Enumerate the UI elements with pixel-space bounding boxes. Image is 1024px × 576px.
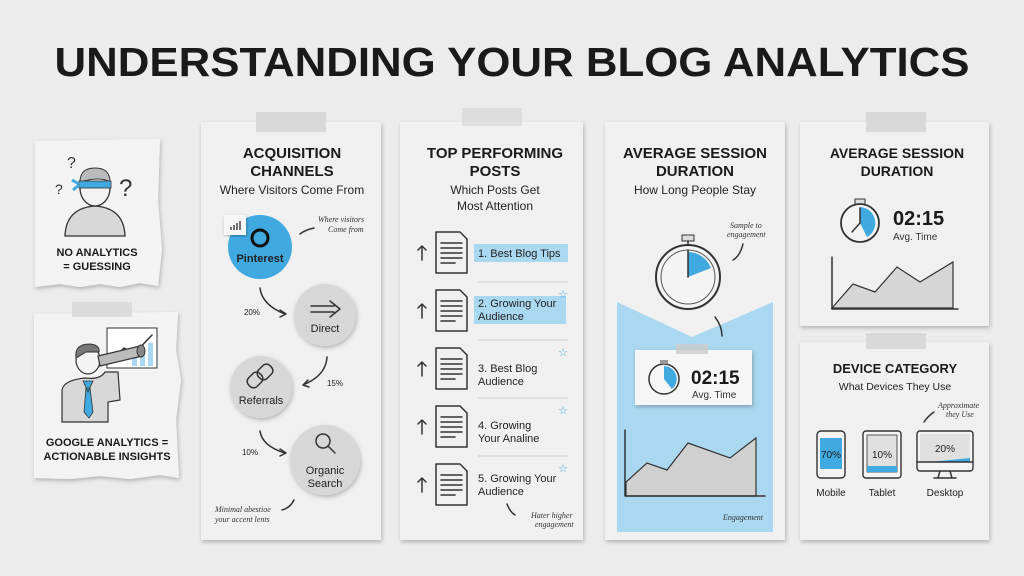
text: no analytics = guessing: NO ANALYTICS: [56, 247, 138, 259]
panel: average session duration summary: [800, 112, 989, 326]
icon: desktop 20%: 20%: [935, 444, 955, 455]
note: approximate: Approximate: [937, 401, 979, 410]
heading: DURATION: [861, 163, 933, 179]
chart: engagement area: Engagement: [722, 513, 764, 522]
list: posts: ☆: [558, 289, 568, 301]
text: google analytics = actionable insights: [43, 437, 171, 463]
arrows with percents: 20%: [244, 308, 260, 317]
callout: 02:15: [635, 344, 752, 405]
panel: top performing posts: [400, 108, 583, 540]
heading: Most Attention: [457, 199, 533, 213]
icon: tablet 10%: [863, 431, 901, 499]
callout: 02:15: 02:15: [691, 368, 740, 389]
heading: [623, 145, 767, 197]
node: organic search: [290, 425, 360, 495]
note: minimal: your accent lents: [214, 515, 270, 524]
list: posts: Audience: [478, 311, 524, 323]
heading: What Devices They Use: [839, 381, 951, 393]
note: higher engagement: [507, 504, 574, 529]
node: organic search: Search: [308, 478, 342, 490]
icon: blindfolded person: ?: [55, 181, 63, 197]
list: posts: ☆: [558, 463, 568, 475]
node: referrals: [230, 356, 292, 418]
panel: average session duration summary: Avg. Time: [893, 232, 938, 243]
note: where visitors come from: Come from: [328, 225, 364, 234]
icon: desktop 20%: Desktop: [927, 488, 964, 499]
list: posts: Audience: [478, 486, 524, 498]
callout: 02:15: Avg. Time: [692, 390, 737, 401]
note: approximate: they Use: [946, 410, 974, 419]
node: direct: [294, 284, 356, 346]
heading: [830, 145, 964, 179]
node: referrals: Referrals: [239, 395, 284, 407]
icon: blindfolded person: ?: [119, 175, 132, 202]
icon: desktop 20%: [917, 431, 973, 499]
arrows with percents: 15%: [327, 379, 343, 388]
note: sample to engagement: engagement: [727, 230, 766, 239]
note: minimal: [214, 500, 294, 524]
list: posts: 3. Best Blog: [478, 363, 537, 375]
title: UNDERSTANDING YOUR BLOG ANALYTICS: [54, 39, 970, 85]
heading: AVERAGE SESSION: [623, 145, 767, 162]
note: where visitors come from: [300, 215, 364, 234]
panel: average session duration summary: 02:15: [893, 208, 944, 230]
text: google analytics = actionable insights: GOOGLE ANALYTICS =: [46, 437, 168, 449]
icon: stopwatch: [656, 235, 720, 309]
panel: average session duration: [605, 122, 785, 540]
heading: Where Visitors Come From: [220, 183, 364, 197]
text: google analytics = actionable insights: ACTIONABLE INSIGHTS: [43, 451, 171, 463]
chart: area: [832, 257, 958, 309]
list: posts: ☆: [558, 405, 568, 417]
heading: CHANNELS: [250, 163, 334, 180]
panel: device category: [800, 333, 989, 540]
node: organic search: Organic: [306, 465, 345, 477]
node: direct: Direct: [311, 323, 339, 335]
heading: DURATION: [656, 163, 734, 180]
note: higher engagement: engagement: [535, 520, 574, 529]
heading: ACQUISITION: [243, 145, 341, 162]
icon: blindfolded person: ?: [67, 155, 76, 172]
list: posts: [418, 232, 568, 505]
note: higher engagement: Hater higher: [530, 511, 573, 520]
node: pinterest: [224, 215, 292, 279]
list: posts: 1. Best Blog Tips: [478, 248, 561, 260]
list: posts: Audience: [478, 376, 524, 388]
list: posts: Your Analine: [478, 433, 539, 445]
note: sample to engagement: Sample to: [730, 221, 762, 230]
icon: mobile 70%: [816, 431, 846, 499]
list: posts: 2. Growing Your: [478, 298, 557, 310]
heading: POSTS: [470, 163, 520, 180]
heading: [427, 145, 563, 213]
chart: engagement area: [625, 430, 765, 522]
note: approximate: [924, 401, 979, 422]
heading: How Long People Stay: [634, 183, 756, 197]
arrows with percents: 10%: [242, 448, 258, 457]
icon: stopwatch: [841, 199, 879, 242]
note: minimal: Minimal abestioe: [214, 505, 271, 514]
panel: acquisition channels: [201, 112, 381, 540]
arrows with percents: [242, 288, 343, 457]
heading: [833, 361, 957, 393]
list: posts: 4. Growing: [478, 420, 531, 432]
icon: man with telescope: [62, 328, 157, 422]
heading: DEVICE CATEGORY: [833, 361, 957, 376]
heading: AVERAGE SESSION: [830, 145, 964, 161]
card: no analytics: [35, 139, 162, 287]
text: no analytics = guessing: = GUESSING: [63, 261, 131, 273]
text: no analytics = guessing: [56, 247, 138, 273]
icon: tablet 10%: Tablet: [869, 488, 896, 499]
icon: blindfolded person: [55, 155, 132, 236]
list: posts: 5. Growing Your: [478, 473, 557, 485]
list: posts: ☆: [558, 347, 568, 359]
heading: [220, 145, 364, 197]
note: where visitors come from: Where visitors: [318, 215, 364, 224]
icon: mobile 70%: 70%: [821, 450, 841, 461]
note: sample to engagement: [727, 221, 766, 260]
heading: Which Posts Get: [450, 183, 540, 197]
node: pinterest: Pinterest: [236, 253, 284, 265]
card: google analytics: [34, 302, 181, 479]
heading: TOP PERFORMING: [427, 145, 563, 162]
icon: tablet 10%: 10%: [872, 450, 892, 461]
icon: mobile 70%: Mobile: [816, 488, 846, 499]
